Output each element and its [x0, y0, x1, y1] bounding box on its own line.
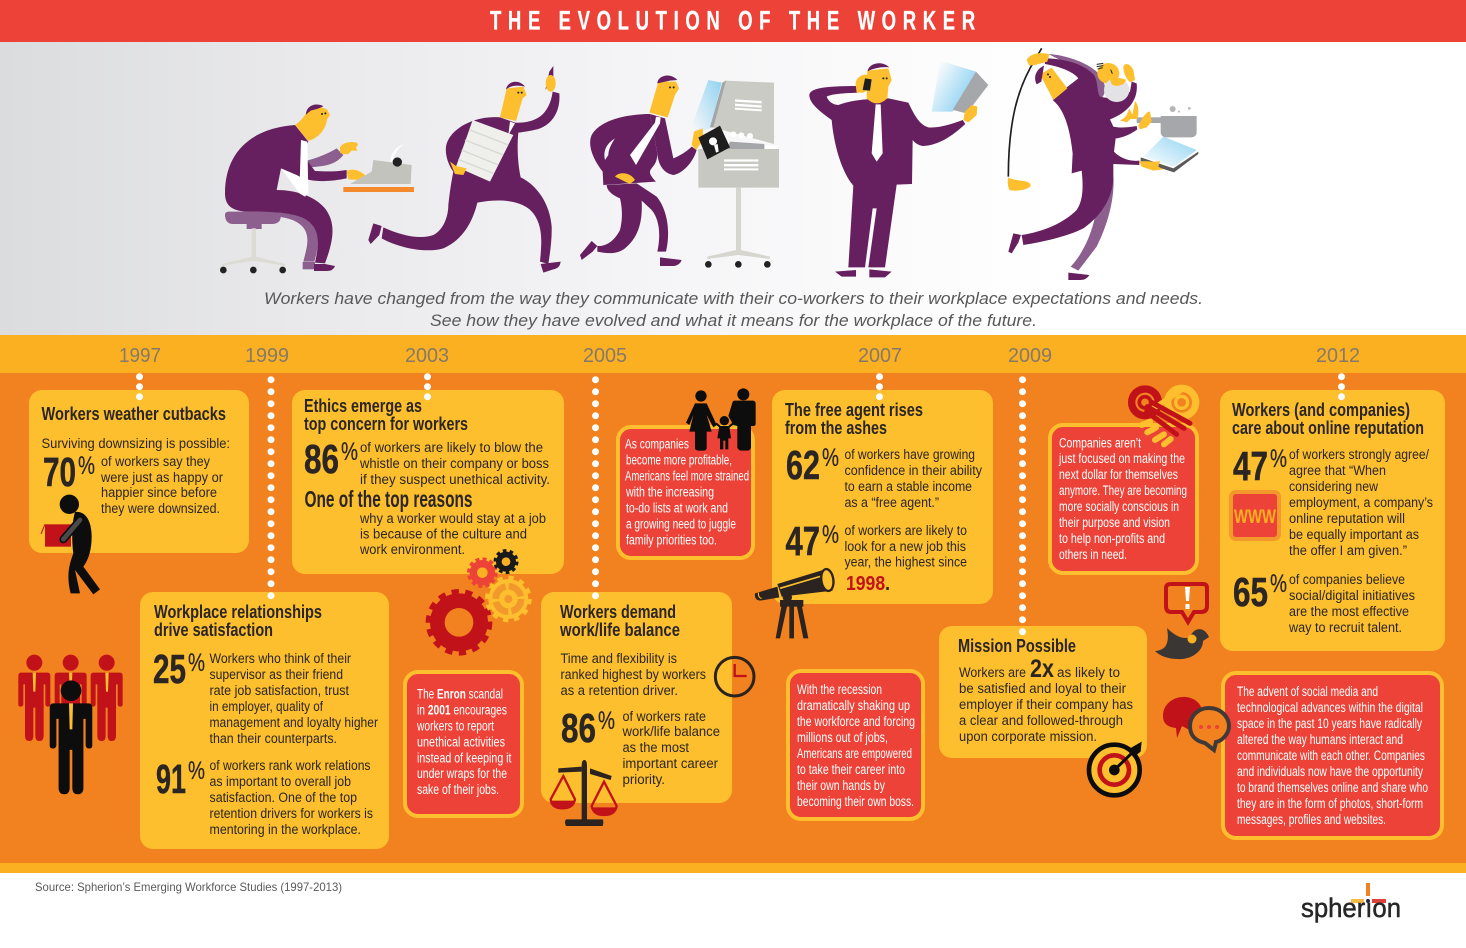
- card: free agent: 1998.: [846, 573, 890, 595]
- callout: Enron: instead of keeping it: [417, 750, 512, 766]
- icon: team of workers: [18, 655, 123, 794]
- card: Workplace relationships: of workers rank work relations: [210, 758, 371, 773]
- callout: social media: The advent of social media and: [1237, 684, 1378, 699]
- card: Mission Possible: a clear and followed-through: [959, 713, 1123, 728]
- card: online reputation: way to recruit talent.: [1288, 620, 1402, 635]
- intro text: [264, 289, 1203, 330]
- icon: handshake heart: [1132, 388, 1196, 444]
- icon: speech bubbles: [1163, 697, 1229, 750]
- callout: recession: the workforce and forcing: [797, 714, 915, 729]
- card: Mission Possible: Mission Possible: [958, 636, 1076, 656]
- card: online reputation: of companies believe: [1289, 572, 1405, 587]
- card: Workers demand work/life balance: ranked highest by workers: [560, 667, 706, 682]
- card: online reputation: social/digital initiatives: [1289, 588, 1415, 603]
- icon: scales: [551, 760, 617, 826]
- callout: socially conscious: Companies aren’t: [1059, 436, 1141, 450]
- figure: multitasking worker 2012: [932, 48, 1198, 280]
- callout: socially conscious: more socially conscious in: [1059, 499, 1179, 514]
- card: free agent: look for a new job this: [844, 539, 966, 554]
- card: Workplace relationships: satisfaction. One of the top: [210, 790, 357, 805]
- card: free agent: to earn a stable income: [844, 479, 972, 494]
- card: Workers weather cutbacks: 70: [43, 449, 76, 495]
- card: Workplace relationships: Workplace relationships: [154, 602, 322, 622]
- card: free agent: 62: [786, 442, 820, 488]
- callout: Enron: in 2001 encourages: [417, 702, 507, 718]
- timeline band: 2003: [405, 345, 449, 367]
- card: Workers weather cutbacks: %: [78, 452, 95, 480]
- callout: Enron: under wraps for the: [417, 766, 507, 781]
- timeline band: 2005: [583, 345, 627, 367]
- card: Ethics emerge: One of the top reasons: [304, 486, 472, 512]
- callout: social media: messages, profiles and websites.: [1237, 812, 1386, 827]
- callout: family priorities: with the increasing: [625, 484, 714, 500]
- card: Ethics emerge: %: [341, 438, 358, 466]
- tablet held by previous worker: [932, 61, 988, 122]
- card: online reputation: are the most effective: [1289, 604, 1409, 619]
- timeline band: 1999: [245, 345, 289, 367]
- figure: typist 1997: [220, 104, 414, 273]
- callout: socially conscious: [1050, 425, 1197, 573]
- callout: recession: dramatically shaking up: [797, 698, 910, 713]
- card: Mission Possible: as likely to: [1057, 665, 1120, 680]
- card: Workplace relationships: 25: [153, 646, 186, 692]
- icon: worker carrying box: [41, 495, 100, 594]
- card: Ethics emerge: top concern for workers: [304, 414, 468, 434]
- card: Workers weather cutbacks: of workers say they: [101, 454, 210, 469]
- card: online reputation: the offer I am given.”: [1289, 543, 1407, 558]
- callout: recession: their own hands by: [797, 778, 885, 793]
- card: Ethics emerge: if they suspect unethical activity.: [360, 472, 550, 487]
- lower band: [0, 863, 1466, 873]
- card: free agent: The free agent rises: [785, 400, 923, 420]
- icon: family: [686, 388, 756, 451]
- figure: floppy disk worker 2003: [580, 75, 779, 268]
- card: Workers demand work/life balance: as a retention driver.: [560, 683, 678, 698]
- gear: yellow: [487, 578, 530, 620]
- card: Workers weather cutbacks: happier since before: [101, 485, 217, 500]
- card: Ethics emerge: why a worker would stay at a job: [359, 511, 546, 526]
- card: Mission Possible: upon corporate mission.: [959, 729, 1097, 744]
- title bar: THE EVOLUTION OF THE WORKER: [490, 5, 975, 35]
- card: Workers demand work/life balance: Time and flexibility is: [560, 651, 677, 666]
- callout: family priorities: become more profitable,: [626, 452, 732, 468]
- callout: social media: altered the way humans interact and: [1237, 732, 1403, 747]
- card: online reputation: Workers (and companies): [1232, 400, 1410, 420]
- callout: socially conscious: just focused on making the: [1058, 451, 1185, 466]
- card: Workplace relationships: management and loyalty higher: [210, 715, 378, 730]
- callout: Enron: workers to report: [416, 718, 494, 734]
- figure: multitasker heads and baby: [1027, 53, 1138, 122]
- callout: family priorities: [618, 427, 753, 558]
- timeline band: 2007: [858, 345, 902, 367]
- dotted timeline connectors: [140, 377, 1342, 634]
- card: Ethics emerge: 86: [304, 436, 339, 482]
- card: Workplace relationships: mentoring in the workplace.: [210, 822, 361, 837]
- figure: phone and tablet worker 2005: [809, 63, 965, 277]
- callout: family priorities: a growing need to juggle: [626, 516, 736, 532]
- card: online reputation: employment, a company’s: [1289, 495, 1433, 510]
- icon: telescope: [755, 568, 835, 638]
- card: online reputation: %: [1270, 570, 1287, 598]
- card: Ethics emerge: of workers are likely to blow the: [360, 440, 543, 455]
- source note: Source: Spherion’s Emerging Workforce Studies (1997-2013): [35, 880, 342, 894]
- callout: socially conscious: anymore. They are becoming: [1059, 483, 1187, 498]
- icon: www badge: [1231, 492, 1279, 539]
- timeline band: 2012: [1316, 345, 1360, 367]
- callout: family priorities: Americans feel more strained: [625, 468, 749, 484]
- icon: alert speech bubble: [1166, 584, 1207, 622]
- card: online reputation: 47: [1233, 443, 1268, 489]
- card: Workplace relationships: drive satisfaction: [154, 620, 273, 640]
- card: Workplace relationships: %: [188, 757, 205, 785]
- card: online reputation: %: [1270, 445, 1287, 473]
- card: Workplace relationships: as important to overall job: [210, 774, 351, 789]
- callout: recession: becoming their own boss.: [797, 794, 914, 809]
- card: online reputation: be equally important as: [1289, 527, 1419, 542]
- card: Ethics emerge: [292, 390, 564, 574]
- card: Ethics emerge: whistle on their company or boss: [359, 456, 549, 471]
- callout: recession: [788, 671, 923, 819]
- card: Workers weather cutbacks: they were downsized.: [101, 501, 220, 516]
- figure: runner 1999: [368, 66, 561, 273]
- card: Workers demand work/life balance: work/life balance: [559, 620, 680, 640]
- timeline band: [0, 335, 1466, 373]
- gear: black: [495, 551, 517, 573]
- card: Workers demand work/life balance: [541, 592, 732, 803]
- card: Workers weather cutbacks: Surviving downsizing is possible:: [42, 436, 230, 451]
- card: Workers demand work/life balance: %: [598, 707, 615, 735]
- card: Ethics emerge: is because of the culture and: [360, 526, 527, 542]
- hero panel: [0, 42, 1466, 335]
- gear: light red: [469, 559, 496, 586]
- card: Workplace relationships: Workers who think of their: [210, 651, 351, 666]
- card: free agent: confidence in their ability: [844, 463, 982, 478]
- card: Mission Possible: employer if their company has: [959, 697, 1133, 712]
- callout: social media: [1223, 673, 1442, 838]
- card: online reputation: of workers strongly agree/: [1289, 447, 1429, 462]
- card: Workplace relationships: supervisor as their friend: [210, 667, 343, 682]
- card: Mission Possible: [939, 626, 1147, 758]
- callout: recession: millions out of jobs,: [797, 730, 888, 745]
- card: free agent: of workers are likely to: [844, 523, 967, 538]
- intro text: See how they have evolved and what it means for the workplace of the future.: [430, 311, 1037, 330]
- gear: dark red: [428, 591, 490, 653]
- card: Workplace relationships: 91: [156, 756, 186, 802]
- card: online reputation: [1220, 390, 1445, 651]
- intro text: Workers have changed from the way they communicate with their co-workers to their workplace expectations and needs.: [264, 289, 1203, 308]
- card: Workplace relationships: %: [188, 649, 205, 677]
- callout: recession: to take their career into: [797, 762, 905, 777]
- callout: family priorities: to-do lists at work and: [626, 500, 728, 516]
- timeline band: 2009: [1008, 345, 1052, 367]
- callout: recession: Americans are empowered: [797, 746, 912, 761]
- card: free agent: [772, 390, 993, 604]
- card: free agent: of workers have growing: [844, 447, 975, 462]
- card: Workers demand work/life balance: important career: [622, 756, 718, 771]
- card: Workplace relationships: in employer, quality of: [210, 699, 323, 714]
- logo: spherion: spherıon: [1301, 893, 1401, 923]
- orange timeline background: [0, 373, 1466, 863]
- icon: target: [1089, 742, 1142, 795]
- card: free agent: 47: [786, 518, 820, 564]
- card: Workers demand work/life balance: work/life balance: [622, 724, 720, 739]
- callout: socially conscious: others in need.: [1059, 547, 1127, 562]
- callout: Enron: sake of their jobs.: [417, 782, 499, 797]
- card: Workplace relationships: rate job satisfaction, trust: [210, 683, 349, 698]
- card: free agent: as a “free agent.”: [844, 495, 939, 510]
- icon: www badge: WWW: [1234, 507, 1276, 528]
- callout: socially conscious: next dollar for themselves: [1059, 467, 1178, 482]
- callout: Enron: The Enron scandal: [417, 686, 503, 702]
- card: Mission Possible: 2x: [1030, 655, 1054, 683]
- card: Workers demand work/life balance: of workers rate: [622, 709, 706, 724]
- card: Mission Possible: Workers are: [959, 665, 1026, 680]
- card: Workplace relationships: than their counterparts.: [210, 731, 337, 746]
- title bar: [0, 0, 1466, 42]
- card: Workers weather cutbacks: [29, 390, 249, 553]
- card: Workplace relationships: retention drivers for workers is: [210, 806, 373, 821]
- callout: Enron: unethical activities: [417, 734, 505, 750]
- card: online reputation: agree that “When: [1289, 463, 1386, 478]
- card: Workers demand work/life balance: 86: [561, 705, 596, 751]
- card: Workers weather cutbacks: were just as happy or: [100, 470, 223, 485]
- callout: socially conscious: to help non-profits and: [1059, 531, 1165, 546]
- card: free agent: %: [822, 521, 839, 549]
- card: free agent: %: [822, 444, 839, 472]
- callout: Enron: [405, 672, 522, 816]
- icon: bird: [1155, 628, 1209, 659]
- card: free agent: from the ashes: [785, 418, 887, 438]
- card: Mission Possible: be satisfied and loyal to their: [959, 681, 1126, 696]
- callout: family priorities: As companies: [625, 436, 689, 452]
- card: Workplace relationships: [140, 592, 389, 849]
- icon: clock: [715, 657, 754, 696]
- card: online reputation: online reputation will: [1289, 511, 1405, 526]
- card: Workers weather cutbacks: Workers weather cutbacks: [42, 404, 226, 424]
- card: Workers demand work/life balance: as the most: [622, 740, 689, 755]
- callout: family priorities: family priorities too.: [626, 532, 717, 548]
- callout: recession: With the recession: [797, 682, 882, 697]
- icon: gears: [428, 551, 530, 653]
- callout: socially conscious: their purpose and vision: [1059, 515, 1170, 530]
- card: online reputation: 65: [1233, 569, 1268, 615]
- card: Ethics emerge: work environment.: [359, 542, 465, 557]
- card: free agent: year, the highest since: [844, 554, 967, 570]
- card: Workers demand work/life balance: Workers demand: [560, 602, 676, 622]
- card: online reputation: considering new: [1289, 479, 1378, 494]
- card: Ethics emerge: Ethics emerge as: [304, 396, 422, 416]
- card: Workers demand work/life balance: priority.: [622, 772, 665, 787]
- timeline band: 1997: [119, 345, 161, 367]
